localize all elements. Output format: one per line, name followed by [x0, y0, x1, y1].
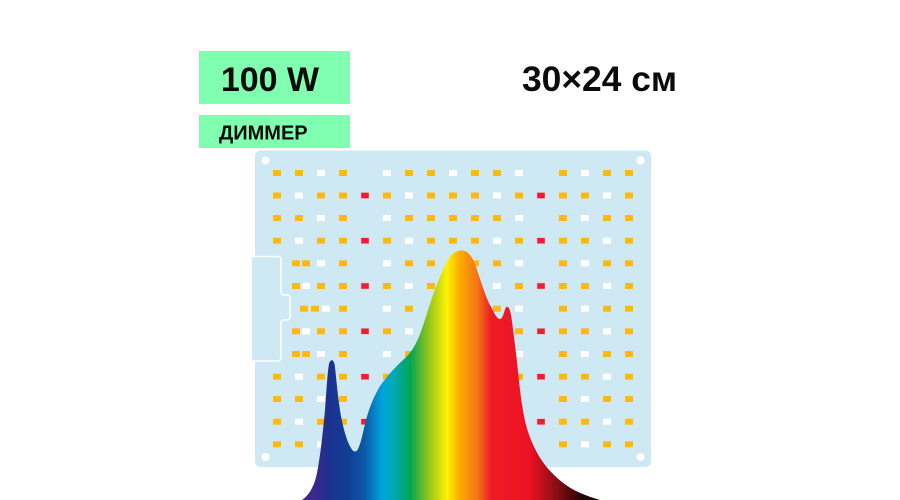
power badge — [199, 51, 350, 104]
board plate — [255, 150, 651, 467]
LED grid — [273, 170, 633, 447]
mounting holes — [262, 156, 644, 461]
LED board — [251, 150, 651, 467]
spectrum chart — [302, 250, 600, 500]
dimmer badge: ДИММЕР — [219, 122, 308, 144]
size label: 30×24 см — [522, 59, 677, 99]
driver module outline — [251, 256, 290, 361]
dimmer badge — [199, 115, 350, 148]
power badge: 100 W — [221, 61, 320, 99]
